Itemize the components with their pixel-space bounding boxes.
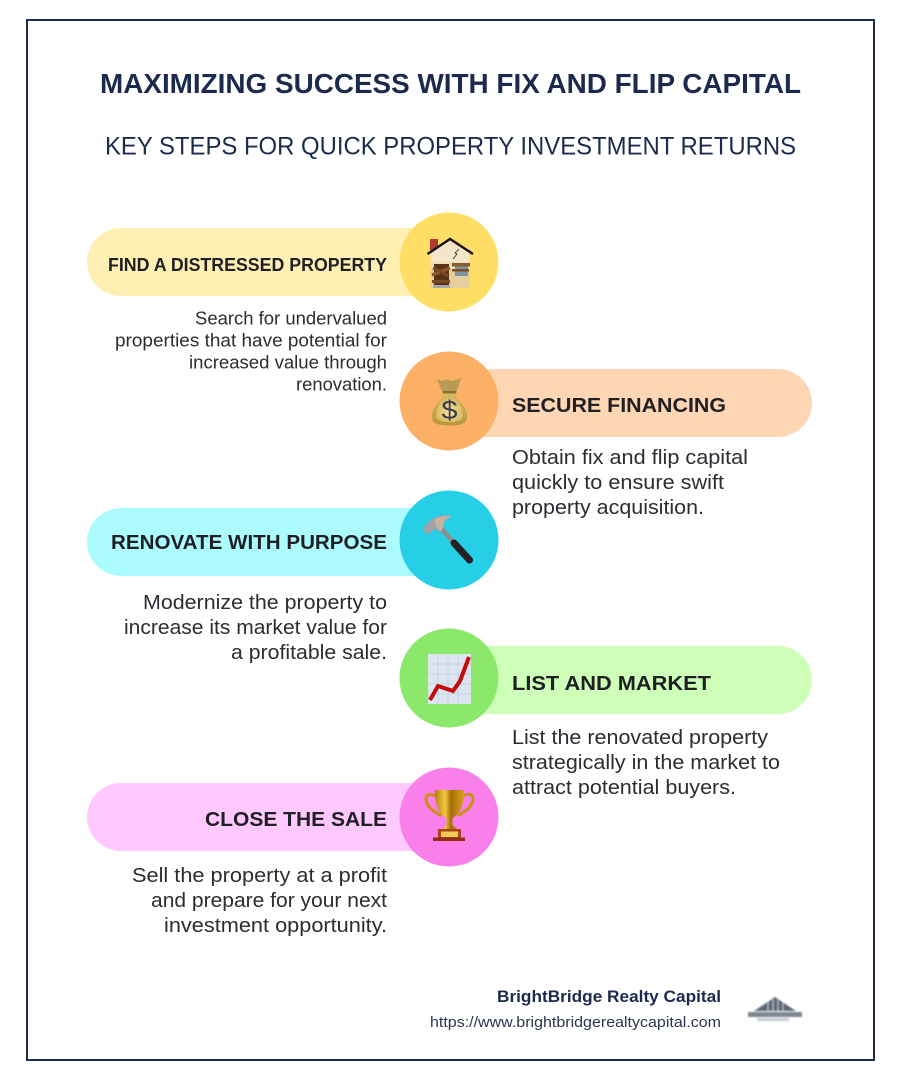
icon: company logo (748, 997, 802, 1021)
footer url: https://www.brightbridgerealtycapital.com (430, 1015, 721, 1031)
panel: step 4 description: attract potential buyers. (512, 777, 736, 799)
step 2 circle (400, 352, 498, 450)
step 5 heading: CLOSE THE SALE (205, 808, 387, 831)
footer company name: BrightBridge Realty Capital (497, 988, 721, 1006)
panel: step 3 description: a profitable sale. (231, 642, 387, 664)
panel: step 5 description: Sell the property at a profit (132, 865, 387, 887)
step 4 pill (450, 646, 812, 714)
panel: step 5 close the sale (87, 768, 498, 866)
panel: step 5 description: investment opportunity. (164, 915, 387, 937)
icon: money bag: $ (442, 395, 458, 425)
panel: step 5 description (132, 865, 387, 937)
panel: step 3 description: increase its market value for (124, 617, 387, 639)
panel: step 2 description (512, 447, 748, 519)
panel: step 1 description: properties that have potential for (115, 330, 387, 350)
step 1 pill (87, 228, 450, 296)
step 3 circle (400, 490, 498, 590)
step 5 circle (400, 768, 498, 866)
panel: step 1 description: renovation. (296, 374, 387, 394)
panel: step 3 description (124, 592, 387, 664)
panel: step 4 list and market (400, 628, 812, 728)
icon: rising chart (428, 654, 471, 704)
subtitle: KEY STEPS FOR QUICK PROPERTY INVESTMENT RETURNS (105, 132, 796, 160)
icon: money bag (432, 378, 467, 426)
panel: step 1 description: increased value through (189, 352, 387, 372)
step 1 circle (400, 212, 498, 312)
panel: step 2 description: quickly to ensure swift (512, 472, 724, 494)
panel: step 1 description: Search for undervalued (195, 307, 387, 328)
step 5 pill (87, 783, 450, 851)
step 3 pill (87, 508, 450, 576)
panel: step 2 secure financing (400, 352, 812, 450)
step 3 heading: RENOVATE WITH PURPOSE (111, 532, 387, 554)
panel: step 1 find a distressed property (87, 212, 499, 312)
step 1 heading: FIND A DISTRESSED PROPERTY (108, 254, 388, 275)
icon: hammer (424, 515, 470, 560)
panel: step 3 description: Modernize the property to (143, 592, 387, 614)
panel: step 4 description (512, 727, 780, 799)
panel: step 4 description: strategically in the market to (512, 752, 780, 774)
panel: step 2 description: Obtain fix and flip capital (512, 447, 748, 469)
panel: step 4 description: List the renovated property (512, 727, 768, 749)
panel: step 5 description: and prepare for your next (151, 890, 387, 912)
panel: step 2 description: property acquisition. (512, 497, 704, 519)
step 4 heading: LIST AND MARKET (512, 672, 711, 695)
step 4 circle (400, 628, 498, 728)
icon: derelict house (428, 239, 473, 288)
icon: trophy (426, 790, 473, 841)
step 2 heading: SECURE FINANCING (512, 394, 726, 417)
title: MAXIMIZING SUCCESS WITH FIX AND FLIP CAPITAL (100, 68, 801, 99)
step 2 pill (450, 369, 812, 437)
panel: step 3 renovate with purpose (87, 490, 498, 590)
panel: step 1 description (115, 307, 387, 394)
